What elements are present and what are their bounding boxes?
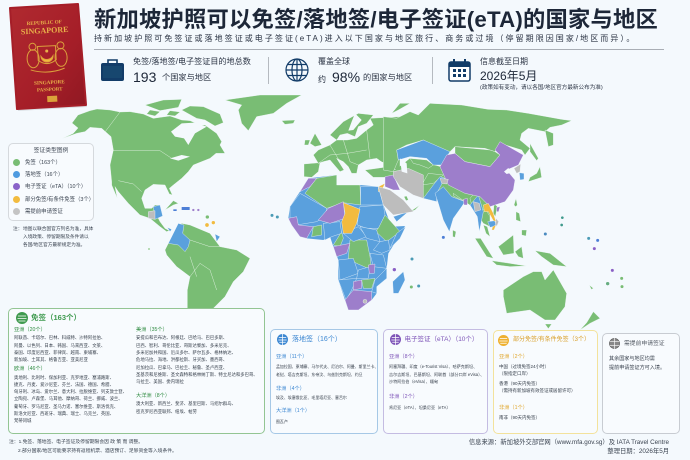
region lists: 图瓦卢 xyxy=(276,419,288,424)
region lists: Americas and Oceania: 多米尼加共和国、厄瓜多尔、萨尔瓦多、格林纳达、 xyxy=(136,350,236,355)
panel: visa on arrival xyxy=(270,329,378,434)
region lists xyxy=(389,354,484,410)
map note: 地图以联合国官方列名为准，具体 xyxy=(23,226,93,231)
icon: visa-free globe xyxy=(16,312,28,324)
region lists: 中国（过境免签24小时） xyxy=(499,364,549,369)
source credit: 整理日期：2026年5月 xyxy=(607,448,669,454)
stat: global coverage xyxy=(285,57,412,85)
panel heading: 落地签（16个） xyxy=(292,336,342,343)
stat: total destinations xyxy=(101,57,251,85)
footnotes xyxy=(9,438,177,454)
stat: data date xyxy=(448,57,603,90)
region lists: 亚洲（11个） xyxy=(276,354,307,360)
region lists: 吉尔吉斯坦、巴基斯坦、阿联酋（部分口岸 eVisa）、 xyxy=(389,372,484,377)
region lists: Asia and Europe: 立陶宛、卢森堡、马耳他、摩纳哥、荷兰、挪威、波兰、 xyxy=(14,396,123,401)
region lists: Asia and Europe: 新加坡、土耳其、格鲁吉亚、亚美尼亚 xyxy=(14,357,88,362)
region lists: Asia and Europe: 匈牙利、冰岛、爱尔兰、意大利、拉脱维亚、列支敦士登、 xyxy=(14,389,127,394)
region lists: 非洲（4个） xyxy=(276,386,305,392)
stat unit: 个国家与地区 xyxy=(162,73,211,82)
region lists: 老挝、塔吉克斯坦、东帝汶、乌兹别克斯坦、约旦 xyxy=(276,372,363,377)
legend item: partial: 部分免签/有条件免签（3个） xyxy=(25,196,94,202)
panel: visa-free xyxy=(8,308,265,434)
stat note: (政策如有变动，请以各国/地区官方最新公布为准) xyxy=(480,84,603,90)
region lists: 沙特阿拉伯（eVisa）、缅甸 xyxy=(389,379,438,384)
region lists: 亚洲（8个） xyxy=(389,354,418,360)
icon: partial globe xyxy=(498,335,509,346)
legend item: eTA: 电子签证（eTA）（10个） xyxy=(25,184,86,190)
region lists: Asia and Europe: 亚洲（20个） xyxy=(14,327,46,333)
subtitle: 持新加坡护照可免签证或落地签证或电子签证(eTA)进入以下国家与地区旅行、商务或过境（停留期限因国家/地区而异）。 xyxy=(94,34,636,43)
legend item: visa on arrival: 落地签（16个） xyxy=(25,172,63,178)
region lists: Americas and Oceania: 危地马拉、海地、洪都拉斯、牙买加、墨西哥、 xyxy=(136,357,227,362)
panel heading: 需提前申请签证 xyxy=(624,341,665,347)
footnotes: 2.部分国家/地区可能要求持有返程机票、酒店预订、足够资金等入境条件。 xyxy=(18,448,177,454)
stat value: 2026年5月 xyxy=(480,69,537,83)
divider xyxy=(432,57,433,84)
region lists: Americas and Oceania: 密克罗尼西亚联邦、纽埃、帕劳 xyxy=(136,409,197,414)
stat label: 信息截至日期 xyxy=(480,57,528,66)
passport cover illustration xyxy=(9,3,87,111)
stat value: 193 xyxy=(133,69,156,85)
region lists: 埃及、埃塞俄比亚、毛里塔尼亚、塞舌尔 xyxy=(276,395,347,400)
map: Americas, Europe and Africa xyxy=(62,95,405,310)
region lists: Americas and Oceania: 美洲（35个） xyxy=(136,327,168,333)
legend item: visa-free xyxy=(13,159,61,166)
header rule xyxy=(94,49,664,50)
panel heading: 部分免签/有条件免签（3个） xyxy=(513,337,590,343)
legend item: visa required: 需提前申请签证 xyxy=(25,209,63,215)
icon: eTA globe xyxy=(390,334,401,345)
source credit xyxy=(469,438,669,454)
panel heading: 免签（163个） xyxy=(31,313,81,322)
region lists: 肯尼亚（eTA）、坦桑尼亚（eTA） xyxy=(389,405,450,410)
region lists: Asia and Europe: 斯洛文尼亚、西班牙、瑞典、瑞士、乌克兰、英国、 xyxy=(14,411,114,416)
icon: globe xyxy=(285,58,309,82)
region lists: 香港（90天内免签） xyxy=(499,381,540,386)
stat unit: 的国家与地区 xyxy=(363,73,412,82)
panel: partial visa-free xyxy=(493,330,598,434)
stat label: 覆盖全球 xyxy=(318,57,350,66)
panel: eTA xyxy=(383,329,488,434)
region lists: 亚洲（2个） xyxy=(499,354,528,360)
region lists: （需持有新加坡有效签证或居留许可） xyxy=(499,388,576,393)
stat value: 约 98% xyxy=(318,69,360,85)
region lists: Americas and Oceania: 安提瓜和巴布达、阿根廷、巴哈马、巴巴多斯、 xyxy=(136,335,227,340)
legend xyxy=(8,143,94,221)
icon: suitcase xyxy=(101,59,124,81)
panel text xyxy=(609,355,665,371)
region lists xyxy=(276,354,378,424)
region lists: Asia and Europe: 泰国、印度尼西亚、菲律宾、越南、柬埔寨、 xyxy=(14,350,101,355)
region lists: Asia and Europe: 欧洲（46个） xyxy=(14,366,46,372)
legend item: visa on arrival xyxy=(13,171,63,178)
passport cover illustration: SINGAPORE xyxy=(34,79,66,87)
panel text: 其余国家与地区均需 xyxy=(609,356,655,362)
icon: calendar xyxy=(448,59,471,82)
region lists: （限指定口岸） xyxy=(499,371,530,376)
panel text: 提前申请签证方可入境。 xyxy=(609,365,665,371)
map: Asia and Oceania xyxy=(378,103,623,330)
map note: 注： xyxy=(13,226,22,231)
region lists: 非洲（1个） xyxy=(499,405,528,411)
region lists: 孟加拉国、柬埔寨、马尔代夫、尼泊尔、阿曼、斯里兰卡、 xyxy=(276,364,378,369)
passport cover illustration: SINGAPORE xyxy=(21,25,69,36)
panel: visa required xyxy=(602,333,680,434)
region lists xyxy=(499,354,576,420)
map note xyxy=(13,226,94,247)
icon: arrival globe xyxy=(277,334,288,345)
region lists: 非洲（2个） xyxy=(389,394,418,400)
stat label: 免签/落地签/电子签证目的地总数 xyxy=(133,57,251,66)
region lists: 大洋洲（1个） xyxy=(276,408,310,414)
region lists: Asia and Europe: 梵蒂冈城 xyxy=(14,418,31,423)
region lists: Asia and Europe: 阿曼、以色列、日本、韩国、马来西亚、文莱、 xyxy=(14,343,105,348)
region lists: Asia and Europe xyxy=(14,326,127,423)
passport cover illustration: REPUBLIC OF xyxy=(26,19,62,27)
region lists: 南非（90天内免签） xyxy=(499,415,540,420)
map: inland water xyxy=(170,113,388,168)
region lists: Americas and Oceania: 巴西、智利、哥伦比亚、哥斯达黎加、多米尼克、 xyxy=(136,343,232,348)
footnotes: 注：1.免签、落地签、电子签证及停留期限会因 政 策 而 调整。 xyxy=(9,440,143,445)
legend item: visa required xyxy=(13,208,63,215)
region lists: Americas and Oceania xyxy=(136,326,258,414)
region lists: 阿塞拜疆、印度（e-Tourist Visa）、哈萨克斯坦、 xyxy=(389,364,477,369)
map note: 入境政策、停留期限及条件请以 xyxy=(23,234,89,239)
icon: gray globe xyxy=(609,338,620,349)
divider xyxy=(268,57,269,84)
title: 新加坡护照可以免签/落地签/电子签证(eTA)的国家与地区 xyxy=(94,7,658,32)
region lists: Americas and Oceania: 大洋洲（8个） xyxy=(136,393,170,399)
region lists: Americas and Oceania: 乌拉圭、美国、委内瑞拉 xyxy=(136,379,184,384)
region lists: Americas and Oceania: 尼加拉瓜、巴拿马、巴拉圭、秘鲁、圣卢西亚、 xyxy=(136,365,227,370)
region lists: Asia and Europe: 阿联酋、卡塔尔、巴林、科威特、沙特阿拉伯、 xyxy=(14,335,105,340)
region lists: Americas and Oceania: 澳大利亚、新西兰、斐济、基里巴斯、马绍尔群岛、 xyxy=(136,401,236,406)
region lists: Asia and Europe: 捷克、丹麦、爱沙尼亚、芬兰、法国、德国、希腊、 xyxy=(14,382,114,387)
legend item: visa-free: 免签（163个） xyxy=(25,160,61,166)
map note: 各国/地区官方最新规定为准。 xyxy=(23,242,85,247)
panel heading: 电子签证（eTA）（10个） xyxy=(404,336,478,343)
region lists: Asia and Europe: 葡萄牙、罗马尼亚、圣马力诺、塞尔维亚、斯洛伐克、 xyxy=(14,404,118,409)
legend title: 签证类型图例 xyxy=(34,148,68,154)
region lists: Americas and Oceania: 圣基茨和尼维斯、圣文森特和格林纳丁斯、特立尼达和多巴哥、 xyxy=(136,372,258,377)
source credit: 信息来源：新加坡外交部官网（www.mfa.gov.sg）及 IATA Travel Centre xyxy=(469,439,669,446)
passport cover illustration: PASSPORT xyxy=(37,87,63,94)
region lists: Asia and Europe: 奥地利、比利时、保加利亚、克罗地亚、塞浦路斯、 xyxy=(14,375,114,380)
